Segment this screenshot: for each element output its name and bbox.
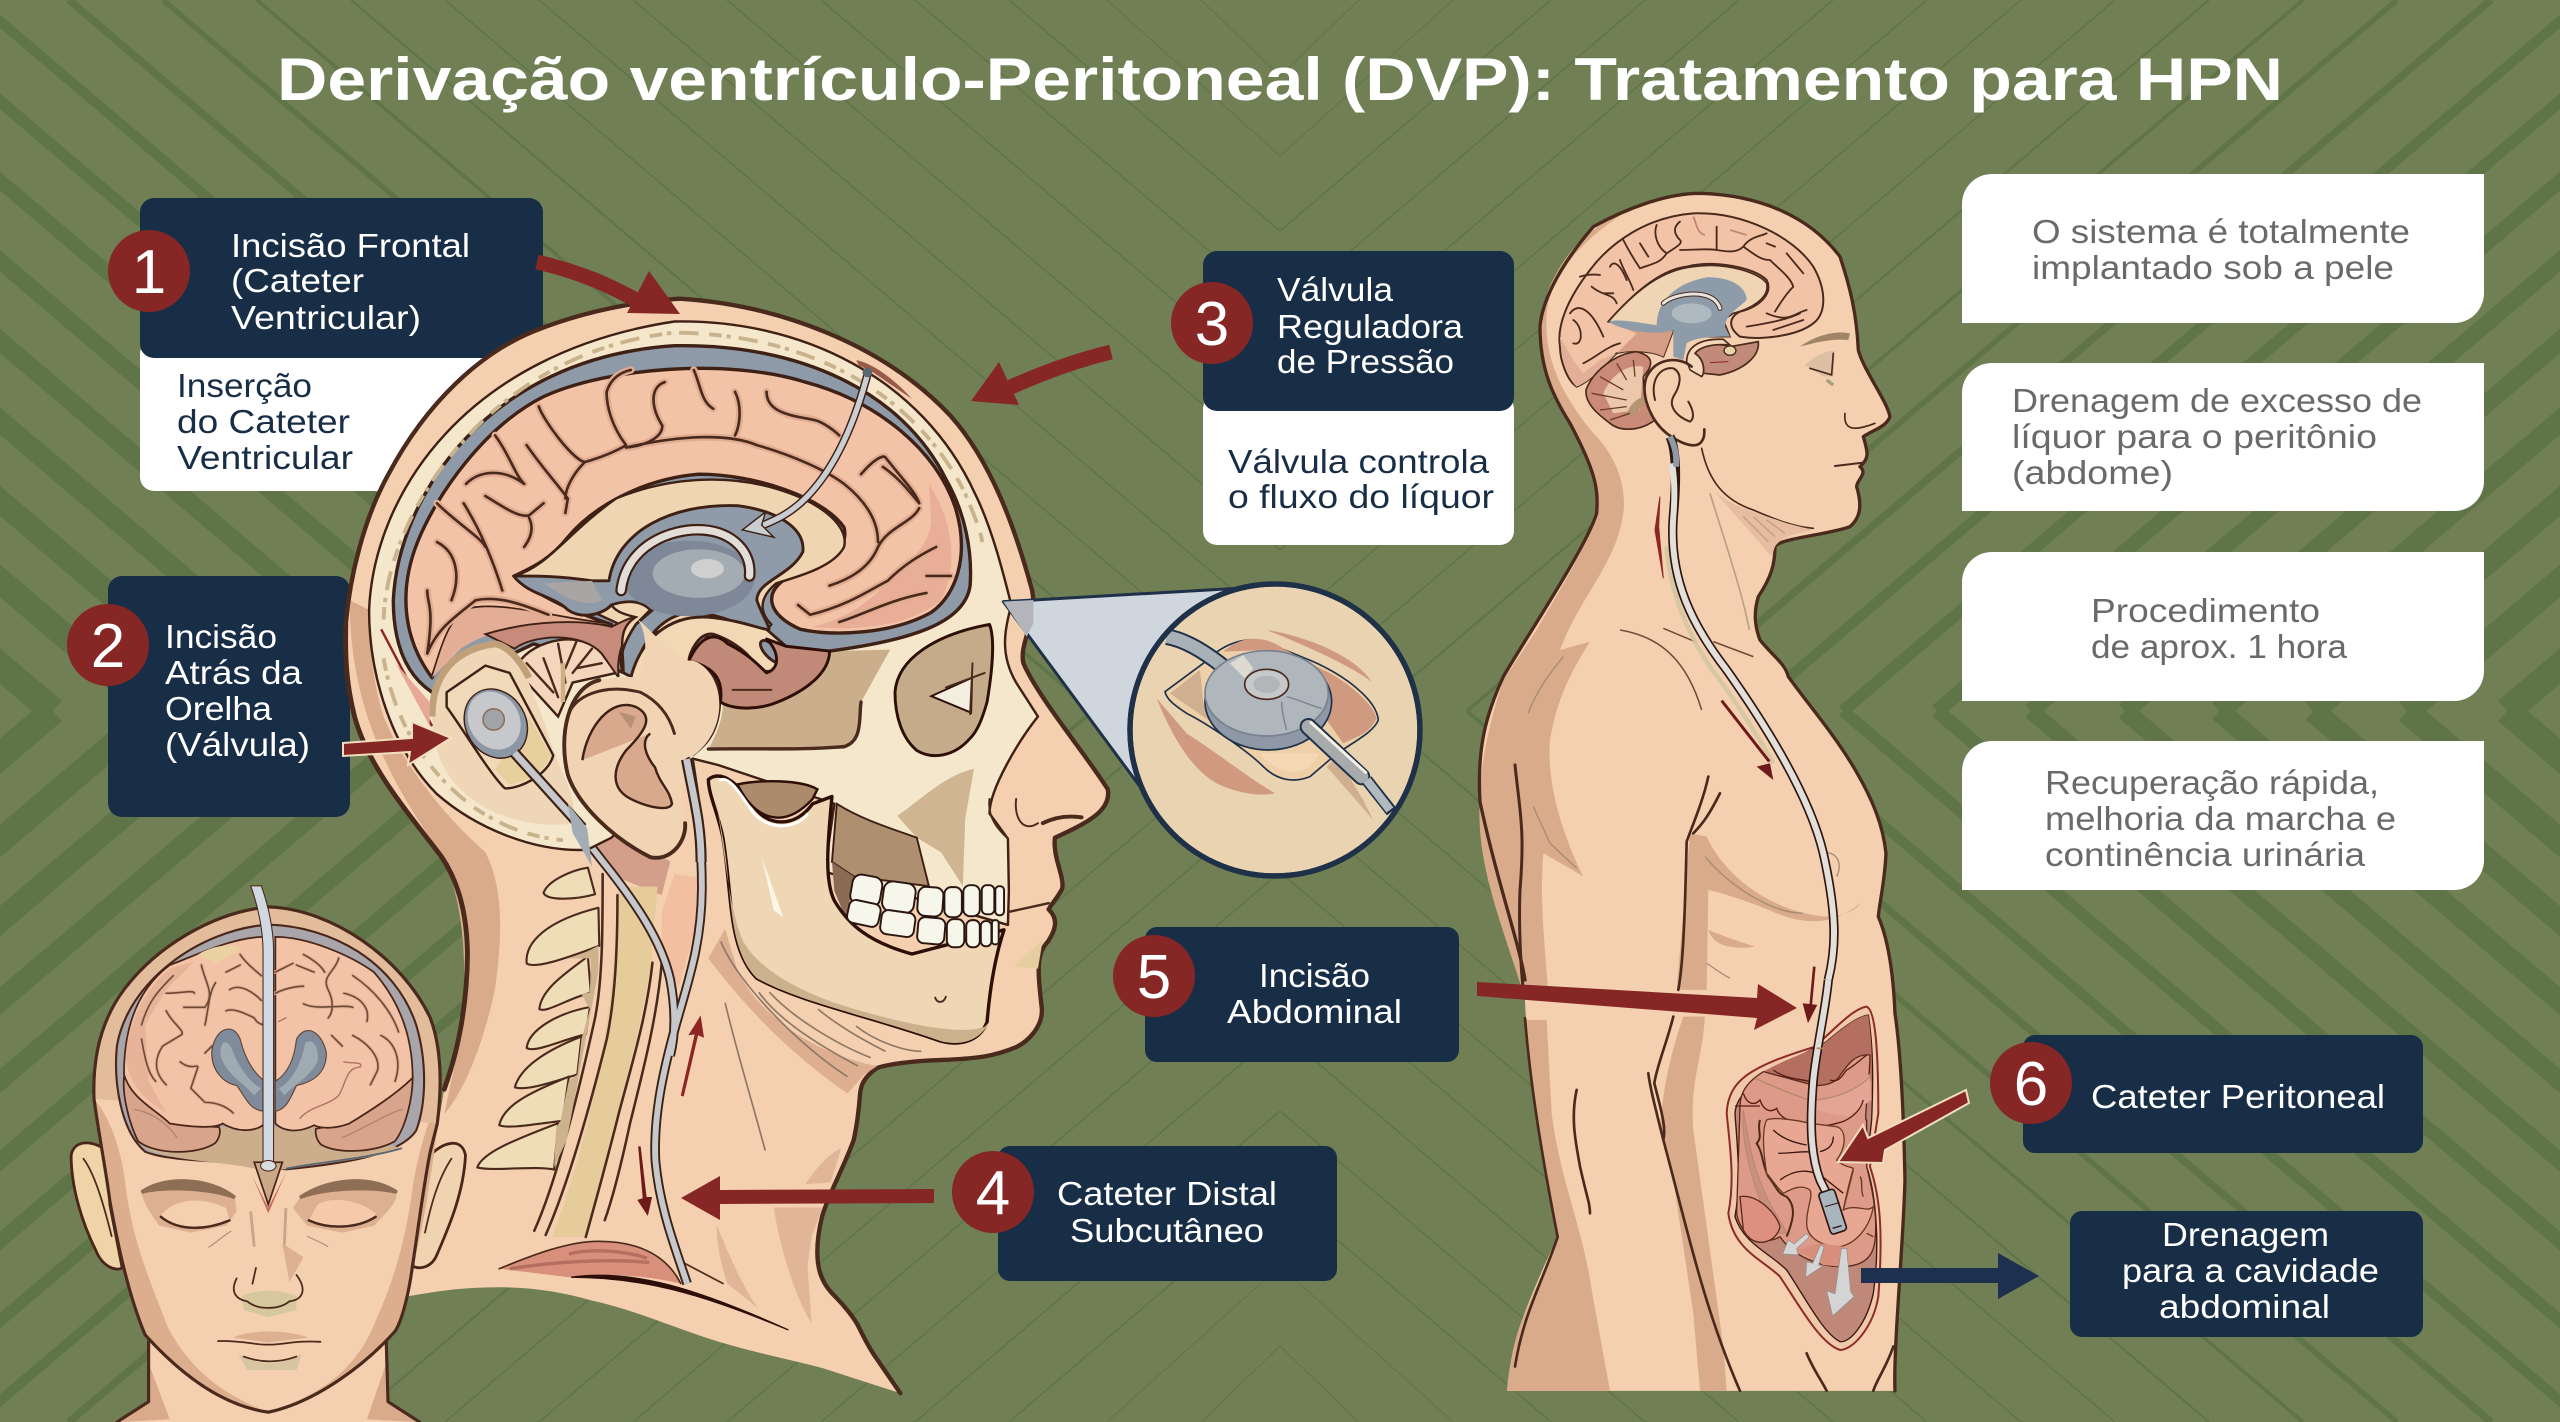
- abdominal cutaway with intestines: [1727, 980, 1881, 1350]
- info card: drainage: [1962, 363, 2484, 511]
- panel: step 3 valve: o fluxo do líquor: [1228, 478, 1494, 515]
- panel: step 4 distal catheter: [952, 1146, 1337, 1281]
- info card: drainage: líquor para o peritônio: [2012, 418, 2377, 455]
- full body profile illustration: [1479, 193, 1905, 1391]
- panel: step 1 frontal incision: (Cateter: [231, 262, 364, 299]
- back shading: [350, 600, 500, 1114]
- clavicle lines: [1620, 628, 1823, 1137]
- info card: implanted: O sistema é totalmente: [2032, 213, 2410, 250]
- panel: step 2 incision behind ear: Orelha: [165, 690, 273, 727]
- entry point: [254, 1162, 282, 1204]
- info card: recovery: continência urinária: [2045, 836, 2366, 873]
- facial features: [1800, 332, 1850, 347]
- suture dots on skull: [384, 333, 982, 840]
- deep brain: [689, 637, 830, 708]
- arrow: step 3 to head: [971, 352, 1111, 405]
- small ear: [1646, 358, 1705, 447]
- neck anatomy: [477, 760, 921, 1330]
- panel: step 5 abdominal incision: 5: [1137, 943, 1171, 1012]
- flow arrows neck: [681, 1015, 704, 1096]
- info card: drainage: (abdome): [2012, 454, 2173, 491]
- zygomatic gap: [737, 781, 817, 818]
- panel: step 3 valve: Reguladora: [1277, 308, 1464, 345]
- lateral ventricles: [212, 1029, 265, 1111]
- panel: step 2 incision behind ear: 2: [91, 612, 125, 681]
- burr hole region: [432, 644, 574, 825]
- arrow: step 6 to catheter: [1838, 1090, 1969, 1163]
- tube from valve: [514, 753, 582, 828]
- ears: [71, 1143, 122, 1269]
- panel: step 4 distal catheter: Cateter Distal: [1057, 1175, 1277, 1212]
- panel: step 1 frontal incision: 1: [132, 238, 166, 307]
- panel: step 6 peritoneal catheter: 6: [2014, 1050, 2048, 1119]
- magnified valve inset: [1003, 584, 1420, 876]
- small corpus: [1608, 265, 1767, 337]
- outlet tube: [1308, 727, 1362, 777]
- temporal lobes: [124, 1078, 220, 1152]
- valve body: [1205, 653, 1332, 750]
- panel: step 1 frontal incision: Incisão Frontal: [231, 227, 470, 264]
- fornix arc: [621, 530, 750, 591]
- tube from ear: [687, 759, 701, 862]
- info card: implanted: implantado sob a pele: [2032, 249, 2394, 286]
- info card: recovery: melhoria da marcha e: [2045, 800, 2396, 837]
- main head: sagittal section illustration: [346, 299, 1108, 1393]
- panel: step 6 peritoneal catheter: Cateter Peritoneal: [2091, 1078, 2385, 1115]
- peritoneal opening: [1727, 1007, 1881, 1350]
- brain: [406, 368, 961, 678]
- small ventricle: [1608, 277, 1747, 360]
- brows and eyes: [142, 1181, 237, 1233]
- cranial cavity dura: [393, 346, 971, 702]
- neck vein: [1655, 497, 1663, 578]
- teeth: [846, 873, 1004, 947]
- arrow: step 2 to valve: [343, 722, 451, 765]
- cerebellum: [518, 639, 616, 717]
- info card: procedure time: [1962, 552, 2484, 701]
- hemispheres: [124, 937, 265, 1130]
- body outline: [1479, 193, 1905, 1391]
- burr valve: [452, 678, 540, 770]
- mouth: [233, 1332, 309, 1343]
- inset skin folds: [1157, 630, 1372, 795]
- tip of catheter: [1811, 980, 1830, 1200]
- ear: [564, 620, 719, 858]
- panel: drainage: abdominal: [2159, 1288, 2330, 1325]
- panel: step 5 abdominal incision: Abdominal: [1227, 993, 1402, 1030]
- catheter tubes in neck: [522, 760, 702, 1284]
- panel: step 4 distal catheter: 4: [976, 1159, 1010, 1228]
- panel: step 1 frontal incision: Ventricular: [177, 439, 353, 476]
- gyri: [427, 370, 951, 654]
- face: [94, 907, 440, 1412]
- panel: step 6 peritoneal catheter: [1990, 1035, 2423, 1153]
- small bowel: [1737, 1055, 1876, 1267]
- brain window: [116, 925, 424, 1169]
- lower jaw: [708, 776, 1004, 1043]
- arrow: drainage: [1861, 1253, 2039, 1299]
- corpus callosum: [514, 480, 845, 641]
- ventricular catheter with arrow: [757, 375, 867, 528]
- panel: step 1 frontal incision: do Cateter: [177, 403, 350, 440]
- arrow: step 4 to distal catheter: [681, 1176, 934, 1220]
- panel: step 1 frontal incision: Ventricular): [231, 299, 421, 336]
- small cerebellum: [1586, 352, 1655, 429]
- eye orbit: [895, 624, 993, 756]
- frontal catheter: [251, 886, 274, 1164]
- brainstem: [631, 617, 786, 758]
- skull cranium and face bone: [369, 321, 1038, 925]
- arm and torso lines: [1515, 765, 1523, 990]
- panel: step 2 incision behind ear: Atrás da: [165, 654, 303, 691]
- panel: drainage: Drenagem: [2162, 1216, 2329, 1253]
- body shading: [1479, 213, 1624, 993]
- info card: implanted: [1962, 174, 2484, 323]
- gyri shading: [427, 370, 951, 654]
- skin silhouette: [346, 299, 1108, 1393]
- panel: step 2 incision behind ear: [67, 576, 350, 817]
- spine column: [552, 887, 658, 1237]
- arrow: step 1 to frontal entry: [537, 262, 680, 314]
- vertebrae: [477, 868, 599, 1170]
- info card: drainage: Drenagem de excesso de: [2012, 382, 2422, 419]
- ventricle: [514, 506, 803, 678]
- arrow: step 5 to abdomen: [1477, 982, 1797, 1030]
- panel: step 3 valve: Válvula controla: [1228, 443, 1490, 480]
- panel: step 2 incision behind ear: Incisão: [165, 618, 277, 655]
- inlet tube: [1167, 637, 1223, 667]
- body skin: [1479, 193, 1905, 1391]
- info card: procedure time: Procedimento: [2091, 592, 2320, 629]
- frontal head illustration: [71, 886, 465, 1422]
- upper jaw cavity: [832, 804, 929, 886]
- body catheter: [1667, 437, 1834, 980]
- drainage arrows: [1783, 1233, 1854, 1316]
- flow arrow on chest: [1722, 701, 1769, 762]
- panel: step 5 abdominal incision: [1113, 927, 1459, 1062]
- panel: step 3 valve: [1171, 251, 1514, 545]
- small head brain: [1559, 213, 1823, 387]
- nose: [242, 1291, 296, 1317]
- panel: drainage: para a cavidade: [2122, 1252, 2379, 1289]
- panel: step 1 frontal incision: [108, 198, 544, 491]
- info card: procedure time: de aprox. 1 hora: [2091, 628, 2348, 665]
- gyri lines: [135, 955, 402, 1138]
- panel: step 5 abdominal incision: Incisão: [1259, 957, 1370, 994]
- panel: drainage: [2070, 1211, 2423, 1337]
- panel: step 3 valve: 3: [1195, 290, 1229, 359]
- small diencephalon: [1695, 342, 1758, 375]
- temporal fossa: [708, 650, 890, 749]
- panel: step 2 incision behind ear: (Válvula): [165, 726, 310, 763]
- panel: step 3 valve: Válvula: [1277, 271, 1394, 308]
- cranial red mark: [381, 629, 432, 726]
- neck: [117, 1342, 420, 1422]
- panel: step 3 valve: de Pressão: [1277, 343, 1454, 380]
- title: Derivação ventrículo-Peritoneal (DVP): Tratamento para HPN: [277, 46, 2283, 113]
- panel: step 1 frontal incision: Inserção: [177, 367, 312, 404]
- panel: step 4 distal catheter: Subcutâneo: [1070, 1212, 1264, 1249]
- info card: recovery: Recuperação rápida,: [2045, 764, 2379, 801]
- info card: recovery: [1962, 741, 2484, 890]
- shoulder muscle: [499, 1241, 681, 1284]
